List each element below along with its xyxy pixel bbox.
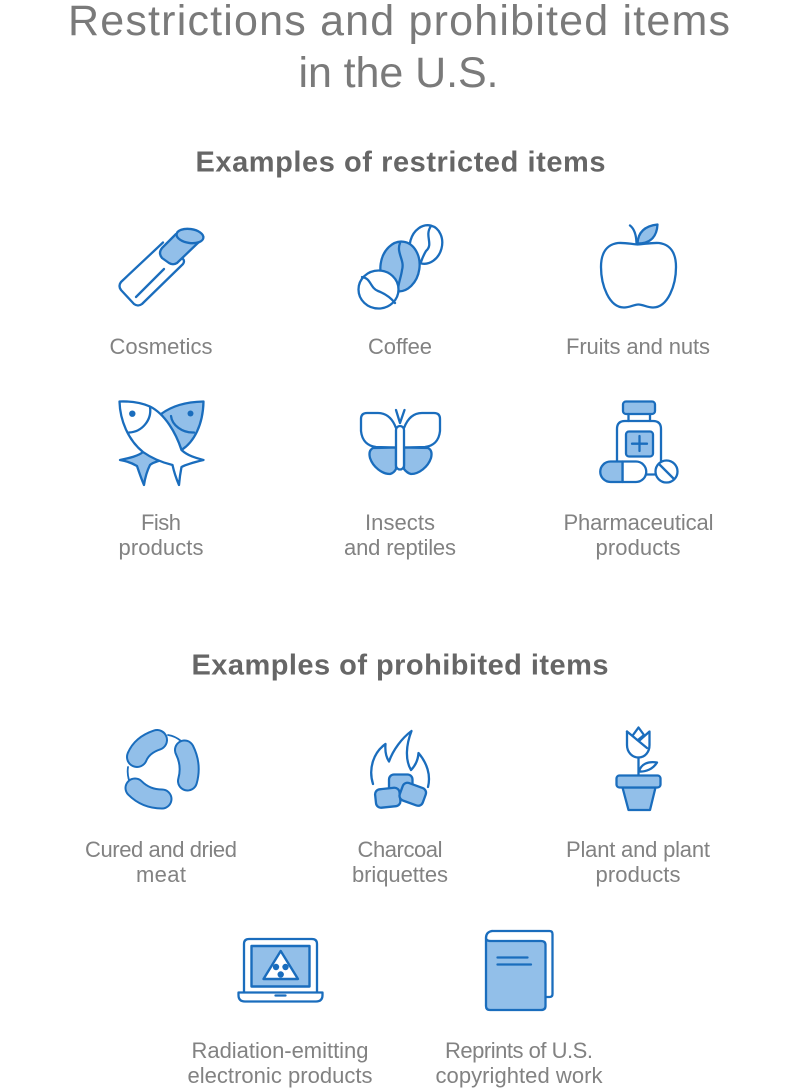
label: reprints of U.S. copyrighted work: copyrighted work <box>436 1063 604 1088</box>
label: fruits and nuts: Fruits and nuts <box>566 334 710 359</box>
icon: book <box>486 931 552 1010</box>
heading: restricted items: Examples of restricted items <box>196 146 606 178</box>
icon: coffee beans <box>358 222 447 308</box>
label: insects and reptiles: and reptiles <box>344 535 456 560</box>
label: cured and dried meat: meat <box>136 862 186 887</box>
label: fish products <box>118 510 204 560</box>
label: radiation-emitting electronic products: Radiation-emitting <box>192 1038 368 1063</box>
label: plant and plant products <box>566 837 710 887</box>
icon: radiation laptop <box>238 939 322 1002</box>
icon: cosmetics lipstick <box>120 227 204 306</box>
icon: fish <box>120 401 204 485</box>
label: pharmaceutical products: products <box>596 535 680 560</box>
label: fish products: products <box>118 535 204 560</box>
label: coffee: Coffee <box>368 334 432 359</box>
label: charcoal briquettes: Charcoal <box>358 837 442 862</box>
label: radiation-emitting electronic products: electronic products <box>188 1063 372 1088</box>
label: insects and reptiles: Insects <box>365 510 435 535</box>
label: pharmaceutical products <box>564 510 714 560</box>
heading: prohibited items: Examples of prohibited items <box>192 650 608 682</box>
icon: charcoal briquettes <box>371 731 429 808</box>
label: insects and reptiles <box>344 510 456 560</box>
label: charcoal briquettes <box>352 837 448 887</box>
label: reprints of U.S. copyrighted work <box>436 1038 604 1088</box>
label: cosmetics: Cosmetics <box>110 334 212 359</box>
label: fish products: Fish <box>141 510 181 535</box>
icon: plant in pot <box>616 728 660 810</box>
label: cured and dried meat: Cured and dried <box>85 837 237 862</box>
label: charcoal briquettes: briquettes <box>352 862 448 887</box>
label: cured and dried meat <box>85 837 237 887</box>
title <box>68 0 730 97</box>
label: radiation-emitting electronic products <box>188 1038 372 1088</box>
icon: pharmaceutical bottle and pills <box>600 402 678 482</box>
label: plant and plant products: products <box>596 862 680 887</box>
icon: cured and dried meat <box>128 735 189 799</box>
label: reprints of U.S. copyrighted work: Reprints of U.S. <box>445 1038 593 1063</box>
icon: butterfly <box>361 410 440 474</box>
title: in the U.S. <box>298 49 498 97</box>
label: pharmaceutical products: Pharmaceutical <box>564 510 714 535</box>
icon: apple <box>601 224 676 308</box>
label: plant and plant products: Plant and plant <box>566 837 710 862</box>
